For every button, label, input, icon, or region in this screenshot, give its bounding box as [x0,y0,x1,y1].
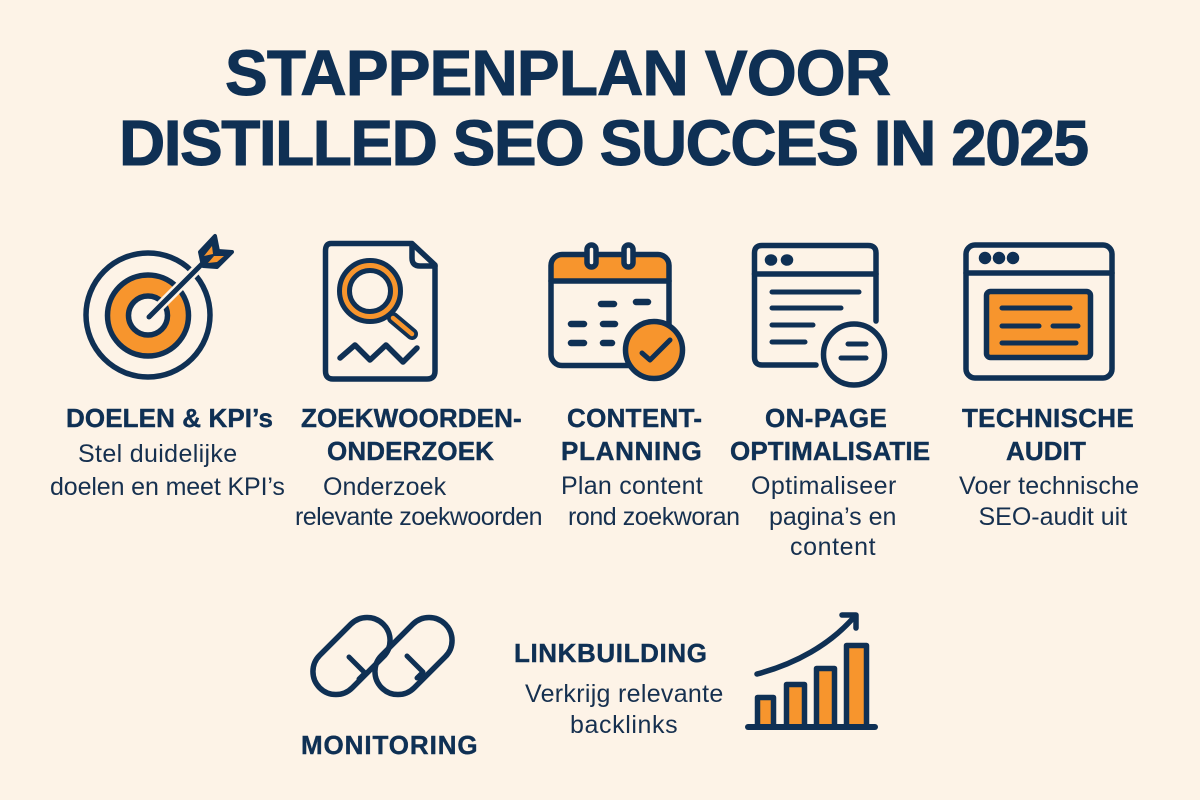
heading: DOELEN & KPI’s [66,403,273,433]
title line 2: DISTILLED SEO SUCCES IN 2025 [119,107,1088,179]
title line 1: STAPPENPLAN VOOR [225,37,890,109]
heading [730,403,930,466]
panel: doelen en KPI's [50,403,285,501]
icon: calendar with check [551,245,682,378]
description: pagina’s en [769,503,896,531]
title [119,37,1088,179]
heading [301,403,522,466]
description: Verkrijg relevante [525,680,724,708]
heading [561,403,702,466]
description: Plan content [561,472,703,500]
description: rond zoekworan [568,503,740,531]
heading: PLANNING [561,436,702,466]
heading: ONDERZOEK [327,436,494,466]
heading: ON-PAGE [765,403,887,433]
description: SEO-audit uit [978,503,1127,531]
icon: growth bar chart with arrow [748,615,875,727]
heading: TECHNISCHE [962,403,1134,433]
description: Optimaliseer [751,472,897,500]
description: Onderzoek [323,473,446,501]
description [525,680,724,739]
description: Stel duidelijke [78,440,238,468]
description [959,472,1139,531]
description: backlinks [570,711,678,739]
heading [962,403,1134,466]
description: content [790,533,876,561]
icon: browser with orange panel [966,245,1112,378]
panel: on-page optimalisatie [730,403,930,561]
heading: LINKBUILDING [514,638,708,668]
icon: browser page with circle [754,246,884,385]
heading: ZOEKWOORDEN- [301,403,522,433]
panel: contentplanning [561,403,740,531]
panel: technische audit [959,403,1139,531]
description: relevante zoekwoorden [295,503,542,531]
description: Voer technische [959,472,1139,500]
description [295,473,542,531]
icon: target with arrow [86,236,232,377]
panel: monitoring: MONITORING [301,730,479,760]
description: doelen en meet KPI’s [50,473,285,501]
panel: linkbuilding [514,638,724,739]
description [751,472,897,561]
description [561,472,740,531]
heading: CONTENT- [567,403,702,433]
description [50,440,285,501]
icon: chain links [303,608,462,704]
heading: OPTIMALISATIE [730,436,930,466]
heading: AUDIT [1006,436,1086,466]
panel: zoekwoordenonderzoek [295,403,542,531]
icon: document with magnifier [326,244,435,379]
